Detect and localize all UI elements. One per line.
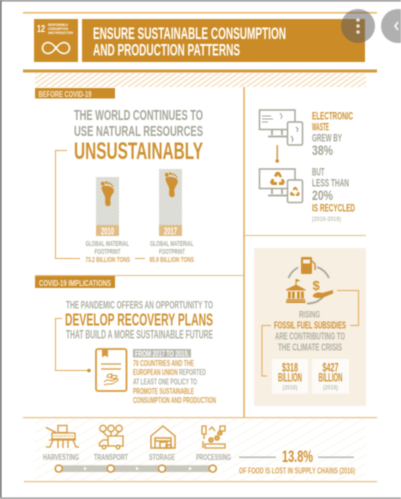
footprint caption 2017: FOOTPRINT [159, 247, 185, 256]
icon: processing line [202, 426, 225, 448]
heading: recovery plans: THAT BUILD A MORE SUSTAINABLE FUTURE [66, 329, 213, 341]
title banner [82, 19, 365, 62]
text: e-waste statistics: ELECTRONIC [312, 110, 353, 122]
footprint bar 2017 [159, 169, 182, 238]
viewer overlay: back button [381, 9, 401, 43]
icon: cracked monitor and tablet [260, 110, 302, 145]
callout: policy statistic: EUROPEAN UNION REPORTED [133, 368, 206, 377]
icon: fuel pump [301, 257, 315, 274]
badge: COVID-19 implications [35, 276, 115, 288]
stat card: 2019 subsidies: $427 [322, 362, 338, 374]
SDG 12 logo tile: 12 [37, 24, 45, 35]
stat card: 2016 subsidies: BILLION [278, 372, 302, 384]
callout: policy statistic: PROMOTE SUSTAINABLE [133, 387, 194, 396]
text: e-waste statistics: BUT [312, 166, 325, 178]
bracket connector [56, 150, 80, 258]
badge: COVID-19 implications: COVID-19 IMPLICATIONS [39, 278, 111, 288]
callout: policy statistic: AT LEAST ONE POLICY TO [133, 378, 197, 386]
icon: storage barn [151, 426, 175, 448]
text: e-waste statistics: 20% [312, 187, 333, 203]
header [23, 12, 377, 87]
footprint bar 2017: 2017 [164, 226, 177, 238]
badge: before COVID-19: BEFORE COVID-19 [38, 89, 92, 99]
title banner: AND PRODUCTION PATTERNS [93, 40, 240, 60]
footprint caption 2010: FOOTPRINT [94, 247, 121, 256]
stat card: 2016 subsidies: (2016) [282, 386, 298, 392]
text: e-waste statistics: WASTE [312, 122, 329, 134]
heading: world continues [74, 108, 203, 165]
text: e-waste statistics: 38% [312, 142, 333, 158]
text: rising fossil fuel subsidies: RISING [299, 310, 320, 320]
footprint caption 2017: GLOBAL MATERIAL [150, 239, 194, 248]
heading: world continues: UNSUSTAINABLY [74, 138, 203, 165]
icon: footprint [101, 181, 114, 206]
footprint caption 2010: GLOBAL MATERIAL [86, 239, 129, 248]
footprint caption 2017 [150, 239, 194, 264]
footprint bar 2010: 2010 [101, 226, 114, 238]
viewer overlay: menu button [341, 9, 375, 43]
icon: harvester [46, 426, 79, 448]
connector with dot [275, 145, 279, 163]
heading: recovery plans: THE PANDEMIC OFFERS AN OPPORTUNITY TO [66, 300, 213, 312]
icon: recycling monitor and tablet [260, 169, 302, 202]
panel: before COVID-19 [35, 88, 203, 264]
section dividers [23, 87, 377, 482]
text: e-waste statistics: IS RECYCLED [312, 202, 355, 214]
stage labels: HARVESTING [43, 452, 79, 462]
stage labels [43, 452, 231, 462]
text: rising fossil fuel subsidies: FOSSIL FUEL SUBSIDIES [274, 320, 346, 332]
SDG 12 logo tile [34, 19, 78, 62]
footprint caption 2017: 85.9 BILLION TONS [150, 255, 194, 264]
stage labels: PROCESSING [196, 452, 231, 462]
stat card: 2019 subsidies: (2019) [323, 386, 338, 392]
stat card: 2016 subsidies [272, 359, 308, 394]
stage labels: STORAGE [149, 452, 175, 462]
callout: policy statistic: 70 COUNTRIES AND THE [133, 359, 194, 368]
panel: COVID-19 implications [35, 276, 216, 405]
icon: policy document with seedling [96, 349, 126, 391]
text: rising fossil fuel subsidies: THE CLIMATE CRISIS [278, 342, 342, 354]
text: e-waste statistics: (2010-2019) [312, 216, 341, 223]
icon: bank building [286, 279, 306, 303]
text: rising fossil fuel subsidies [274, 310, 346, 354]
stage labels: TRANSPORT [94, 452, 129, 462]
icon: footprint [165, 172, 178, 197]
panel: electronic waste [260, 110, 355, 223]
text: e-waste statistics: GREW BY [312, 132, 342, 144]
icon: transport truck [100, 425, 123, 449]
stat card: 2019 subsidies: BILLION [318, 372, 342, 384]
icon: hand with coin: $ [312, 278, 320, 293]
panel: fossil fuel subsidies [254, 248, 366, 406]
heading: world continues: USE NATURAL RESOURCES [74, 124, 203, 140]
panel: food loss in supply chain [35, 418, 366, 480]
stat card: 2016 subsidies: $318 [282, 362, 298, 374]
heading: world continues: THE WORLD CONTINUES TO [74, 108, 203, 124]
callout: policy statistic: FROM 2017 TO 2019, [135, 350, 189, 358]
SDG 12 logo tile: RESPONSIBLE [48, 23, 68, 27]
text: e-waste statistics: LESS THAN [312, 178, 349, 190]
callout: policy statistic [133, 349, 216, 405]
text: e-waste statistics [312, 110, 355, 223]
SDG 12 logo tile: CONSUMPTION [48, 27, 69, 31]
bracket connectors [262, 290, 358, 376]
footprint caption 2010: 73.2 BILLION TONS [86, 255, 130, 264]
stat card: 2019 subsidies [312, 359, 349, 394]
statistic: 13.8 percent food lost: 13.8% [282, 448, 313, 466]
dash between footprint values [135, 258, 145, 259]
callout: policy statistic: CONSUMPTION AND PRODUCTION [133, 396, 216, 405]
bracket connector with dot [56, 318, 91, 372]
footprint bar 2010 [96, 177, 119, 238]
footprint caption 2010 [86, 239, 130, 264]
icon: subsidy cycle [286, 257, 333, 304]
SDG 12 logo tile: AND PRODUCTION [48, 31, 74, 35]
statistic: 13.8 percent food lost [239, 448, 355, 475]
supply chain track [55, 465, 217, 472]
heading: recovery plans: DEVELOP RECOVERY PLANS [65, 310, 213, 330]
text: rising fossil fuel subsidies: ARE CONTRIBUTING TO [275, 332, 345, 342]
heading: recovery plans [65, 300, 213, 341]
